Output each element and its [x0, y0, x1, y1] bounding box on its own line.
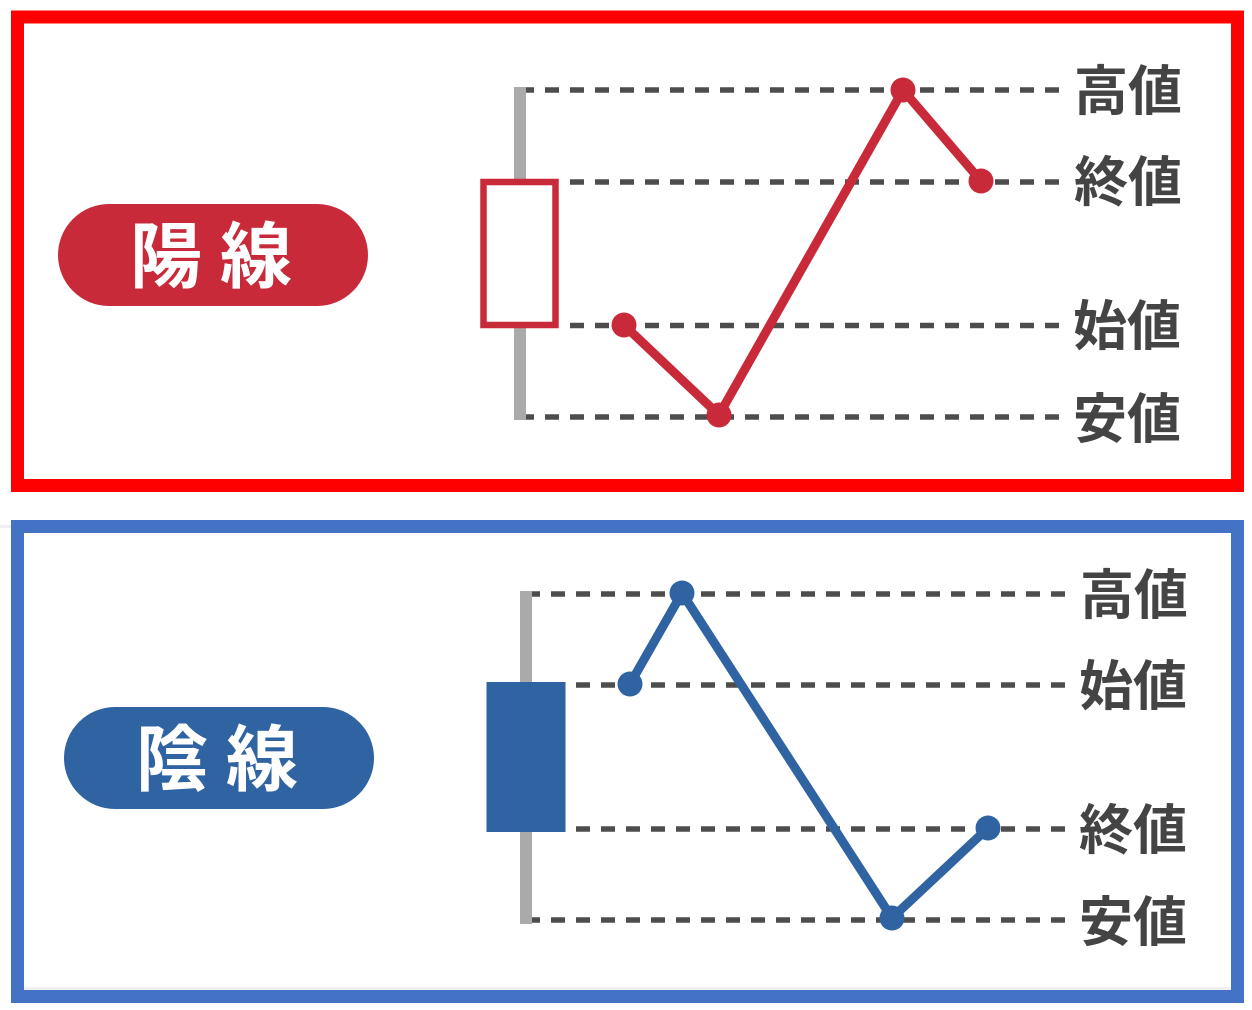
price labels: 終値 [1074, 153, 1182, 213]
pill label: 陽線 [58, 204, 368, 306]
pill label: 陰線: 陰 [136, 721, 208, 801]
pill label: 陰線: 線 [226, 721, 298, 801]
price labels [1073, 62, 1182, 450]
price labels: 終値 [1079, 801, 1187, 861]
price path line [618, 580, 1000, 930]
candlestick: bullish [484, 87, 556, 420]
price labels: 始値 [1079, 657, 1187, 717]
price labels: 始値 [1073, 297, 1181, 357]
price labels: 安値 [1073, 390, 1181, 450]
panel: bullish candle [18, 17, 1238, 486]
price labels: 高値 [1074, 62, 1182, 122]
panel: bearish candle [18, 526, 1238, 996]
price guide lines [526, 594, 1065, 920]
price path line [612, 78, 994, 428]
pill label: 陰線 [64, 707, 374, 809]
price labels: 高値 [1080, 566, 1188, 626]
price labels [1079, 566, 1188, 953]
price labels: 安値 [1079, 893, 1187, 953]
price guide lines [520, 90, 1059, 417]
pill label: 陽線: 線 [220, 218, 292, 298]
pill label: 陽線: 陽 [130, 218, 202, 298]
candlestick: bearish [486, 591, 566, 924]
